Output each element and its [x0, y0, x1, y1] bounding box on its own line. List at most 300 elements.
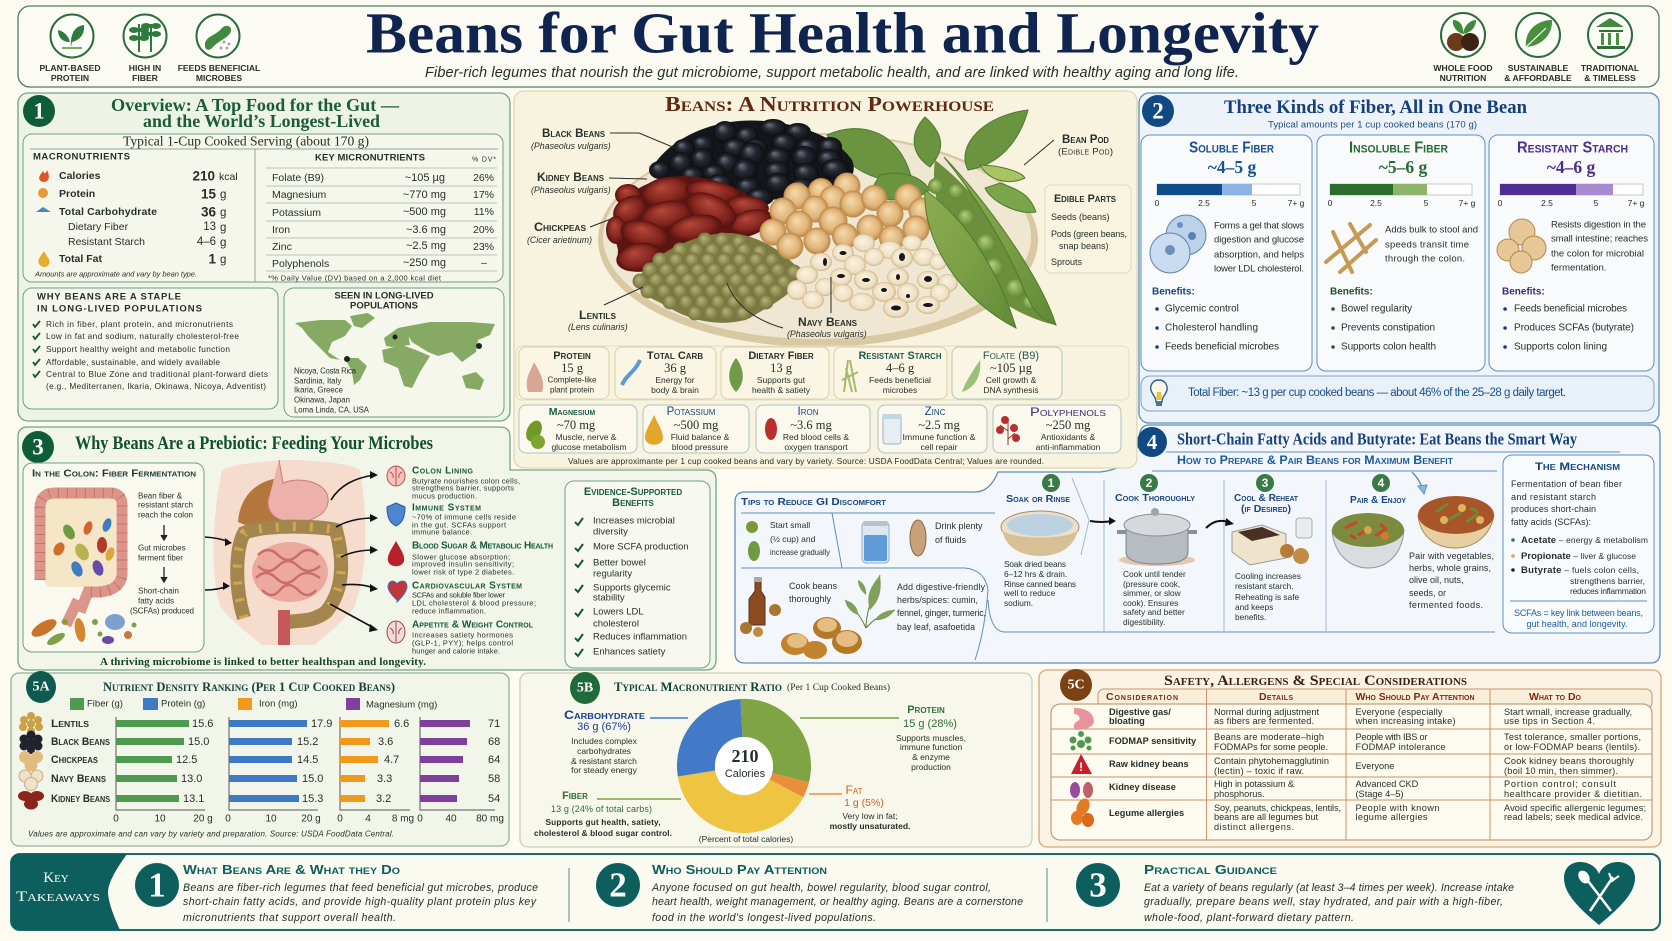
resistant starch card: Resists digestion in the — [1551, 220, 1646, 230]
resistant starch card: Resistant Starch — [1517, 140, 1628, 156]
step 3: cool and reheat — [1232, 474, 1312, 622]
row: fodmap: or low-FODMAP beans (lentils). — [1504, 742, 1640, 752]
label: carbohydrate: 36 g (67%) — [577, 721, 631, 733]
badge 5C — [1060, 669, 1092, 701]
icon: high in fiber: HIGH IN — [129, 63, 161, 73]
blue arrow to bowl — [1412, 472, 1427, 494]
card: iron: oxygen transport — [784, 442, 848, 452]
takeaway 3: gradually, prepare beans well, stay hydrated, and pair with a high-fiber, — [1144, 896, 1503, 908]
card: polyphenols: Antioxidants & — [1041, 432, 1095, 442]
macronutrients: 13 — [203, 221, 216, 233]
card: polyphenols: ~250 mg — [1046, 418, 1091, 432]
micronutrients: 20% — [473, 224, 494, 236]
card: folate: Cell growth & — [986, 375, 1037, 385]
plate of beans illustration — [598, 110, 1056, 347]
icon: start small: (½ cup) and — [770, 534, 816, 544]
bar chart: protein: 17.9 — [311, 718, 332, 730]
badge 2 — [1142, 95, 1174, 127]
bar: resistant: 7+ g — [1628, 198, 1645, 208]
row: raw kidney beans: Cook kidney beans thoroughly — [1504, 756, 1634, 766]
card: dietary fiber: 13 g — [770, 361, 793, 375]
heading: three kinds: Typical amounts per 1 cup cooked beans (170 g) — [1268, 120, 1477, 130]
subheading: prepare and pair: How to Prepare & Pair Beans for Maximum Benefit — [1177, 455, 1453, 467]
takeaway 1: short-chain fatty acids, and provide high-quality plant protein plus key — [183, 896, 537, 908]
row: digestive gas — [1109, 707, 1632, 726]
card: folate: ~105 µg — [990, 361, 1033, 375]
safety table — [1051, 689, 1652, 840]
card: protein: plant protein — [550, 386, 594, 394]
row: legume allergies: Legume allergies — [1109, 808, 1184, 818]
world map: long-lived populations: Nicoya, Costa Rica — [294, 366, 357, 376]
heading: powerhouse: Beans: A Nutrition Powerhouse — [665, 92, 994, 116]
footnote: Values are approximate and can vary by variety and preparation. Source: USDA FoodData Central. — [28, 830, 394, 838]
bean row labels and icons: Kidney Beans — [51, 793, 111, 805]
takeaway 2: Anyone focused on gut health, bowel regularity, blood sugar control, — [651, 882, 991, 894]
badge 5B: 5B — [577, 680, 593, 696]
bar: insoluble — [1328, 184, 1476, 208]
header band — [18, 0, 1659, 87]
row: digestive gas: Digestive gas/ — [1109, 707, 1171, 717]
card: potassium: ~500 mg — [674, 418, 719, 432]
micronutrients: KEY MICRONUTRIENTS — [315, 152, 425, 164]
heading: ratio: (Per 1 Cup Cooked Beans) — [787, 682, 890, 693]
bean row labels and icons: Navy Beans — [51, 773, 107, 785]
step 3: cool and reheat: 3 — [1262, 476, 1269, 490]
card: potassium — [643, 405, 749, 453]
icon: whole food nutrition — [1433, 13, 1493, 83]
panel 3 caption: A thriving microbiome is linked to better healthspan and longevity. — [100, 656, 426, 668]
icon: traditional and timeless: TRADITIONAL — [1581, 63, 1639, 73]
benefit: cardiovascular: reduce inflammation. — [412, 606, 486, 616]
heading: ratio — [614, 680, 890, 694]
macronutrients: Protein — [59, 188, 95, 200]
label: protein: Supports muscles, — [896, 733, 966, 743]
callouts: bean labels: (Edible Pod) — [1058, 146, 1113, 158]
row: raw kidney beans: Raw kidney beans — [1109, 759, 1189, 769]
takeaway 2: food in the world’s longest-lived populations. — [652, 912, 876, 924]
badge 2: 2 — [1152, 98, 1164, 124]
row: raw kidney beans: Everyone — [1356, 761, 1394, 771]
kidney bean mass — [612, 176, 772, 272]
benefit: colon lining: mucus production. — [412, 492, 477, 500]
the mechanism: strengthens barrier, — [1570, 576, 1645, 586]
soluble fiber card: Feeds beneficial microbes — [1165, 342, 1279, 352]
evidence-supported benefits: Lowers LDL — [593, 606, 644, 618]
card: magnesium: glucose metabolism — [551, 442, 627, 452]
chart legend: Fiber (g) — [87, 698, 123, 710]
table header: Consideration — [1106, 691, 1178, 703]
badge 5B — [570, 672, 600, 704]
micronutrients: Zinc — [272, 241, 292, 253]
takeaway 1: What Beans Are & What they Do — [183, 863, 400, 877]
insoluble fiber card: Bowel regularity — [1341, 304, 1412, 314]
row: legume allergies: distinct allergens. — [1214, 822, 1294, 832]
resistant starch card: small intestine; reaches — [1551, 234, 1648, 244]
fermentation steps — [130, 492, 194, 616]
icon: high in fiber: FIBER — [132, 73, 159, 83]
label: carbohydrate — [564, 708, 688, 775]
icon: glass of water — [862, 521, 889, 563]
step 1: soak or rinse: Soak or Rinse — [1006, 493, 1070, 505]
evidence-supported benefits: diversity — [593, 526, 628, 538]
macronutrients: 15 — [201, 186, 216, 202]
takeaway 2: Who Should Pay Attention — [652, 863, 827, 877]
icon: starch granules — [1497, 219, 1546, 273]
key takeaways tab — [11, 854, 127, 930]
row: digestive gas: use tips in Section 4. — [1504, 716, 1595, 726]
label: protein: Protein — [907, 704, 945, 716]
step 3: cool and reheat: and keeps — [1235, 602, 1273, 612]
evidence-supported benefits — [565, 481, 710, 668]
bean row labels and icons — [18, 712, 111, 810]
leaves — [827, 110, 1036, 212]
benefit: appetite: Appetite & Weight Control — [412, 620, 534, 630]
serving table — [23, 134, 503, 282]
panel 3: prebiotic — [18, 427, 716, 670]
label: fat: mostly unsaturated. — [830, 821, 910, 831]
label: carbohydrate: carbohydrates — [577, 746, 631, 756]
torso and digestive tract illustration — [213, 460, 365, 645]
the mechanism: gut health, and longevity. — [1526, 619, 1628, 629]
card: resistant starch — [834, 347, 947, 399]
bar chart: magnesium: 58 — [488, 773, 500, 785]
row: digestive gas: Everyone (especially — [1356, 707, 1443, 717]
label: fiber: Supports gut health, satiety, — [546, 817, 660, 827]
bar chart: fiber: 12.5 — [176, 754, 197, 766]
benefit: colon lining: strengthens barrier, supports — [412, 484, 514, 492]
icon: gel cells — [1150, 215, 1206, 273]
world map: long-lived populations: POPULATIONS — [350, 300, 418, 312]
macronutrients: g — [220, 222, 226, 234]
row icons — [1070, 708, 1094, 827]
black beans — [649, 119, 849, 206]
heading: three kinds — [1224, 98, 1528, 130]
takeaway 3 — [1076, 863, 1514, 924]
tips to reduce GI discomfort — [740, 496, 1495, 660]
step 4: pair and enjoy: herbs, whole grains, — [1409, 563, 1491, 573]
bar chart: protein: 0 — [225, 814, 231, 824]
center panel: nutrition powerhouse — [514, 91, 1137, 468]
step 1: soak or rinse: well to reduce — [1003, 588, 1056, 598]
card: protein: 15 g — [561, 361, 584, 375]
benefit: appetite: (GLP-1, PYY); helps control — [412, 638, 513, 648]
row: digestive gas: Normal during adjustment — [1214, 707, 1319, 717]
benefit: cardiovascular — [388, 580, 536, 616]
micronutrients: % DV* — [472, 156, 496, 164]
bar: soluble: 2.5 — [1198, 198, 1210, 208]
soluble fiber card: Forms a gel that slows — [1214, 220, 1304, 232]
step 1: soak or rinse: Rinse canned beans — [1004, 579, 1076, 589]
row: digestive gas: bloating — [1109, 716, 1145, 726]
bar chart: fiber: 10 — [154, 814, 166, 824]
takeaway 3: whole-food, plant-forward dietary pattern. — [1144, 912, 1354, 924]
benefit: immune system — [387, 502, 516, 536]
micronutrients: Iron — [272, 224, 290, 236]
label: protein: immune function — [900, 742, 962, 752]
row: legume allergies: legume allergies — [1356, 812, 1428, 822]
row: raw kidney beans: (lectin) – toxic if raw. — [1214, 766, 1304, 776]
card: dietary fiber — [721, 347, 829, 399]
label: protein: 15 g (28%) — [903, 718, 957, 730]
edible parts box — [1045, 185, 1131, 273]
arrow — [1090, 517, 1116, 525]
icon: sliced beans — [781, 617, 862, 659]
fermentation steps: Gut microbes — [138, 544, 186, 552]
step 1: soak or rinse: Soak dried beans — [1004, 559, 1066, 569]
icon: start small: Start small — [770, 520, 810, 530]
card: potassium: blood pressure — [672, 442, 728, 452]
soluble fiber card: Glycemic control — [1165, 304, 1239, 314]
step 1: soak or rinse: 1 — [1048, 476, 1055, 490]
arrow — [1206, 518, 1234, 528]
world map: long-lived populations: Okinawa, Japan — [294, 396, 350, 404]
chart legend: Iron (mg) — [259, 698, 298, 710]
icon: traditional and timeless — [1581, 13, 1639, 83]
card: iron: ~3.6 mg — [790, 418, 832, 432]
benefit: cardiovascular: LDL cholesterol & blood pressure; — [412, 598, 536, 608]
macronutrients: g — [220, 254, 226, 266]
icon: feeds beneficial microbes — [178, 14, 260, 83]
bar chart: magnesium — [417, 717, 504, 824]
bar: soluble: 5 — [1252, 198, 1257, 208]
micronutrients — [266, 152, 497, 282]
row: legume allergies: read labels; seek medical advice. — [1504, 812, 1643, 822]
step 3: cool and reheat: Cool & Reheat — [1234, 492, 1299, 504]
heading: three kinds: Three Kinds of Fiber, All in One Bean — [1224, 98, 1528, 118]
bar chart: fiber: 13.0 — [181, 773, 202, 785]
bar chart: fiber: 15.0 — [188, 736, 209, 748]
card: folate — [952, 347, 1062, 399]
label: protein — [800, 704, 966, 772]
the mechanism: The Mechanism — [1535, 461, 1620, 473]
arrows from colon to body and out to benefits — [205, 471, 378, 632]
label: carbohydrate: Includes complex — [571, 736, 638, 746]
icon: high in fiber — [124, 14, 166, 83]
benefit: appetite: Increases satiety hormones — [412, 630, 513, 640]
card: zinc: Zinc — [925, 406, 946, 418]
icon: herb sprig: bay leaf, asafoetida — [897, 622, 975, 632]
step 1: soak or rinse: sodium. — [1004, 598, 1033, 608]
chart legend: Magnesium (mg) — [366, 700, 437, 710]
edible parts box: snap beans) — [1059, 241, 1109, 251]
micronutrients: 26% — [473, 172, 494, 184]
micronutrients: Folate (B9) — [272, 172, 324, 184]
bar: resistant: 2.5 — [1541, 198, 1553, 208]
bar chart: magnesium: 40 — [445, 814, 457, 824]
step 2: cook thoroughly: safety and better — [1123, 607, 1185, 617]
total fiber callout: Total Fiber: ~13 g per cup cooked beans — about 46% of the 25–28 g daily target. — [1188, 387, 1566, 399]
benefit: appetite — [387, 620, 534, 656]
micronutrients: 23% — [473, 241, 494, 253]
icon: start small: increase gradually — [770, 547, 831, 557]
row: raw kidney beans: Contain phytohemagglutinin — [1214, 756, 1329, 766]
takeaway 1 — [135, 863, 538, 924]
total fiber callout — [1141, 376, 1654, 411]
row: legume allergies: People with known — [1356, 803, 1440, 813]
card: polyphenols: anti-inflammation — [1036, 442, 1101, 452]
kidney beans — [606, 173, 775, 275]
step 3: cool and reheat: Reheating is safe — [1235, 592, 1299, 602]
row: legume allergies — [1109, 803, 1646, 832]
key takeaways tab: Key — [43, 870, 69, 886]
macronutrients: Amounts are approximate and vary by bean type. — [34, 270, 197, 278]
insoluble fiber card: Benefits: — [1330, 286, 1373, 298]
row: raw kidney beans — [1109, 756, 1634, 776]
table header — [1106, 691, 1582, 703]
card: total carb: body & brain — [651, 385, 699, 395]
micronutrients: *% Daily Value (DV) based on a 2,000 kcal diet — [268, 274, 442, 282]
heading: prebiotic: Why Beans Are a Prebiotic: Feeding Your Microbes — [75, 434, 433, 454]
row icons: ! — [1079, 760, 1083, 774]
icon: light bulb — [1151, 380, 1167, 406]
bar chart: protein: 15.2 — [297, 736, 318, 748]
bar: soluble: 0 — [1155, 198, 1160, 208]
icon: start small — [746, 520, 831, 561]
bean row labels and icons: Black Beans — [51, 736, 111, 748]
macronutrients: 210 — [192, 168, 215, 184]
icon: beans jar: Drink plenty — [935, 521, 983, 531]
takeaway 3: 3 — [1089, 866, 1107, 904]
bar: insoluble: 0 — [1328, 198, 1333, 208]
insoluble fiber card: speeds transit time — [1385, 240, 1469, 250]
the mechanism: SCFAs = key link between beans, — [1514, 608, 1643, 618]
the mechanism: Acetate – energy & metabolism — [1521, 534, 1648, 546]
bar: soluble — [1155, 184, 1305, 208]
bar chart: protein: 15.0 — [302, 773, 323, 785]
macronutrients: Total Fat — [59, 253, 102, 265]
row: fodmap: Beans are moderate–high — [1214, 732, 1324, 742]
icon: whole food nutrition: WHOLE FOOD — [1433, 63, 1493, 73]
row: fodmap: FODMAP sensitivity — [1109, 736, 1197, 746]
bar chart: fiber: 13.1 — [183, 793, 204, 805]
soluble fiber card: ~4–5 g — [1208, 157, 1256, 177]
row: fodmap: FODMAPs for some people. — [1214, 742, 1328, 752]
label: fat: 1 g (5%) — [844, 797, 884, 809]
label: fat: Fat — [846, 783, 863, 797]
subtitle: Fiber-rich legumes that nourish the gut microbiome, support metabolic health, and are linked with healthy aging and long life. — [425, 65, 1239, 81]
world map: long-lived populations: SEEN IN LONG-LIVED — [334, 290, 434, 302]
chart note: (Percent of total calories) — [699, 834, 793, 844]
callouts: bean labels: (Phaseolus vulgaris) — [531, 141, 611, 151]
callouts: bean labels: (Cicer arietinum) — [527, 235, 592, 245]
bar chart: magnesium: 54 — [488, 793, 500, 805]
badge 1 — [23, 95, 55, 127]
label: fat — [809, 783, 910, 831]
fermentation steps: Bean fiber & — [138, 492, 183, 500]
bar chart: iron: 3.3 — [377, 773, 392, 785]
card: potassium: Potassium — [667, 406, 716, 418]
fermentation steps: reach the colon — [138, 510, 193, 520]
card: total carb: 36 g — [664, 361, 687, 375]
callouts: bean labels: (Phaseolus vulgaris) — [531, 185, 611, 195]
lentils — [632, 232, 802, 320]
macronutrients: 4–6 — [197, 236, 216, 248]
card: resistant starch: Resistant Starch — [858, 350, 942, 362]
card: dietary fiber: health & satiety — [752, 385, 811, 395]
evidence-supported benefits: Better bowel — [593, 558, 646, 568]
micronutrients: 11% — [474, 206, 494, 218]
resistant starch card — [1489, 135, 1654, 371]
bar: resistant — [1498, 184, 1645, 208]
benefit: blood sugar: improved insulin sensitivity; — [412, 560, 514, 568]
benefit: immune system: in the gut. SCFAs support — [412, 520, 506, 530]
row: kidney disease — [1109, 779, 1642, 799]
step 2: cook thoroughly: (pressure cook, — [1123, 579, 1180, 589]
takeaway 1: Beans are fiber-rich legumes that feed beneficial gut microbes, produce — [183, 882, 538, 894]
step 4: pair and enjoy: Pair & Enjoy — [1350, 494, 1406, 506]
icon: sustainable and affordable — [1504, 13, 1572, 83]
edible parts box: Pods (green beans, — [1051, 229, 1127, 239]
panel 1: overview — [18, 93, 510, 421]
macronutrients: 1 — [208, 252, 216, 266]
card: dietary fiber: Supports gut — [757, 375, 806, 385]
card: magnesium: ~70 mg — [557, 418, 596, 432]
benefit: blood sugar — [388, 540, 553, 576]
bar chart: fiber: 20 g — [193, 814, 213, 824]
step 1: soak or rinse — [1001, 474, 1079, 608]
label: fiber: Fiber — [562, 790, 588, 802]
fermentation steps: Short-chain — [138, 586, 179, 596]
macronutrients: MACRONUTRIENTS — [33, 152, 130, 162]
icon: beans jar: of fluids — [935, 535, 967, 545]
benefit: immune system: immune balance. — [412, 528, 472, 536]
resistant starch card: ~4–6 g — [1547, 157, 1595, 177]
step 4: pair and enjoy: Pair with vegetables, — [1409, 551, 1494, 561]
callouts: bean labels: Navy Beans — [798, 315, 858, 329]
why beans are a staple: Support healthy weight and metabolic function — [46, 344, 230, 354]
takeaway 1: 1 — [148, 866, 166, 904]
microbes — [29, 614, 137, 647]
badge 1: 1 — [33, 98, 45, 124]
benefit: appetite: hunger and calorie intake. — [412, 646, 500, 656]
bar chart: iron: 6.6 — [394, 718, 409, 730]
step 2: cook thoroughly: cook). Ensures — [1123, 598, 1178, 608]
heading: SCFAs: Short-Chain Fatty Acids and Butyrate: Eat Beans the Smart Way — [1177, 430, 1577, 448]
row: digestive gas: when increasing intake) — [1354, 716, 1456, 726]
badge 3: 3 — [32, 434, 44, 460]
bar chart: iron: 4.7 — [384, 754, 399, 766]
chart legend — [70, 698, 437, 710]
world map: long-lived populations — [284, 288, 504, 417]
badge 5A: 5A — [32, 680, 50, 694]
row: digestive gas: as fibers are fermented. — [1214, 716, 1314, 726]
row: kidney disease: Advanced CKD — [1356, 779, 1419, 789]
row: kidney disease: High in potassium & — [1214, 779, 1294, 789]
icon: herb sprig: Add digestive-friendly — [897, 582, 986, 592]
takeaway 2 — [569, 863, 1047, 924]
key takeaways band — [11, 854, 1660, 930]
benefit: blood sugar: Blood Sugar & Metabolic Health — [412, 540, 553, 552]
icon: traditional and timeless: & TIMELESS — [1584, 73, 1636, 83]
step 2: cook thoroughly: Cook Thoroughly — [1115, 492, 1195, 504]
macronutrients: g — [220, 189, 226, 201]
bar chart: fiber: 0 — [113, 814, 119, 824]
bar chart: protein: 14.5 — [297, 754, 318, 766]
callouts: bean labels — [527, 126, 1113, 339]
benefit: immune system: ~70% of immune cells reside — [412, 512, 516, 522]
icon: herb sprig: fennel, ginger, turmeric, — [897, 608, 986, 618]
badge 5C: 5C — [1067, 678, 1085, 692]
title: Beans for Gut Health and Longevity — [366, 0, 1319, 66]
micronutrients: ~3.6 mg — [406, 224, 446, 236]
the mechanism: reduces inflammation — [1570, 586, 1646, 596]
resistant starch card: the colon for microbial — [1551, 248, 1644, 260]
icon: plant-based protein — [39, 14, 101, 83]
row: legume allergies: Avoid specific allergenic legumes; — [1504, 803, 1646, 813]
label: fiber — [534, 790, 681, 838]
card: total carb — [615, 347, 716, 399]
label: fiber: 13 g (24% of total carbs) — [551, 804, 652, 814]
